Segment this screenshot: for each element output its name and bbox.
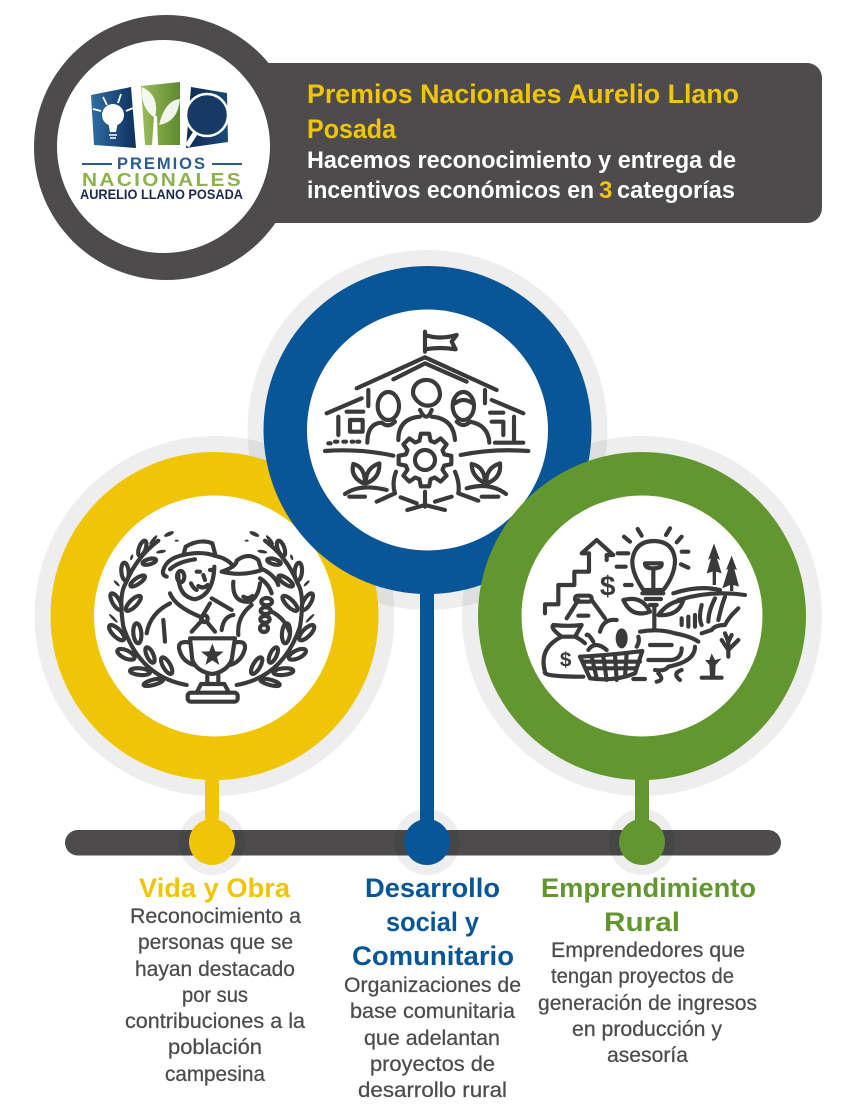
- description: Vida y Obra: personas que se: [138, 931, 293, 954]
- logo wordmark: PREMIOS: [117, 154, 207, 173]
- stem: Emprendimiento: [635, 770, 649, 830]
- description: Desarrollo social: Organizaciones de: [344, 974, 521, 997]
- description: Vida y Obra: hayan destacado: [135, 958, 295, 981]
- logo wordmark: [80, 154, 243, 202]
- circle halos: [34, 250, 822, 796]
- heading: Emprendimiento Rural: [541, 873, 756, 937]
- column: Vida y Obra: [125, 873, 305, 1086]
- timeline bar: [65, 830, 781, 856]
- heading: Desarrollo social y Comunitario: Comunitario: [352, 941, 514, 971]
- header title: Posada: [307, 114, 397, 144]
- heading: Emprendimiento Rural: Emprendimiento: [541, 873, 756, 903]
- logo ring: [34, 15, 299, 280]
- header title: [307, 79, 739, 144]
- logo wordmark: NACIONALES: [82, 170, 243, 190]
- description: Vida y Obra: contribuciones a la: [125, 1010, 305, 1033]
- heading: Desarrollo social y Comunitario: social y: [386, 907, 479, 937]
- heading: Desarrollo social y Comunitario: [352, 873, 514, 971]
- logo: Premios Nacionales: [80, 82, 243, 202]
- description: Vida y Obra: población: [168, 1036, 262, 1059]
- header title: Premios Nacionales Aurelio Llano: [307, 79, 739, 109]
- icon: farmers with trophy and laurel: [107, 530, 317, 702]
- header subtitle: categorías: [617, 177, 735, 204]
- timeline markers: [189, 819, 665, 865]
- header banner: [34, 15, 822, 280]
- description: Emprendimiento Rural: tengan proyectos de: [551, 965, 734, 988]
- heading: Emprendimiento Rural: Rural: [604, 907, 680, 937]
- header bar: [240, 63, 822, 223]
- header subtitle: [307, 147, 736, 204]
- description: Emprendimiento Rural: generación de ingresos: [538, 992, 757, 1015]
- marker halos: [179, 809, 675, 875]
- description: Vida y Obra: [125, 905, 305, 1086]
- heading: Vida y Obra: Vida y Obra: [139, 873, 291, 903]
- description: Desarrollo social: [344, 974, 521, 1102]
- description: Desarrollo social: desarrollo rural: [358, 1079, 507, 1102]
- heading: Desarrollo social y Comunitario: Desarrollo: [365, 873, 500, 903]
- icon: community and gear: [325, 332, 528, 510]
- description: Desarrollo social: base comunitaria: [350, 1000, 515, 1023]
- description: Vida y Obra: por sus: [182, 984, 248, 1007]
- circle: Desarrollo social: [264, 266, 592, 594]
- stem: Desarrollo social: [420, 580, 434, 830]
- column: Desarrollo social y Comunitario: [344, 873, 521, 1102]
- description: Emprendimiento Rural: asesoría: [607, 1044, 688, 1067]
- icon: rural entrepreneurship: [544, 528, 745, 682]
- header subtitle: 3: [599, 177, 612, 204]
- header subtitle: Hacemos reconocimiento y entrega de: [307, 147, 736, 174]
- description: Emprendimiento Rural: Emprendedores que: [551, 939, 745, 962]
- logo background: [57, 40, 270, 253]
- description: Desarrollo social: proyectos de: [370, 1053, 495, 1076]
- description: Emprendimiento Rural: [538, 939, 757, 1067]
- circle: Vida y Obra: [50, 452, 378, 780]
- icon: rural entrepreneurship: $: [600, 571, 616, 602]
- description: Emprendimiento Rural: en producción y: [572, 1018, 723, 1041]
- icon: rural entrepreneurship: $: [560, 649, 572, 672]
- header subtitle: incentivos económicos en: [307, 177, 594, 204]
- description: Vida y Obra: campesina: [165, 1063, 265, 1086]
- logo wordmark: AURELIO LLANO POSADA: [80, 186, 243, 202]
- stem: Vida y Obra: [205, 770, 219, 830]
- circle: Emprendimiento Rural: [478, 452, 806, 780]
- description: Vida y Obra: Reconocimiento a: [130, 905, 301, 928]
- description: Desarrollo social: que adelantan: [364, 1027, 500, 1050]
- column: Emprendimiento Rural: [538, 873, 757, 1067]
